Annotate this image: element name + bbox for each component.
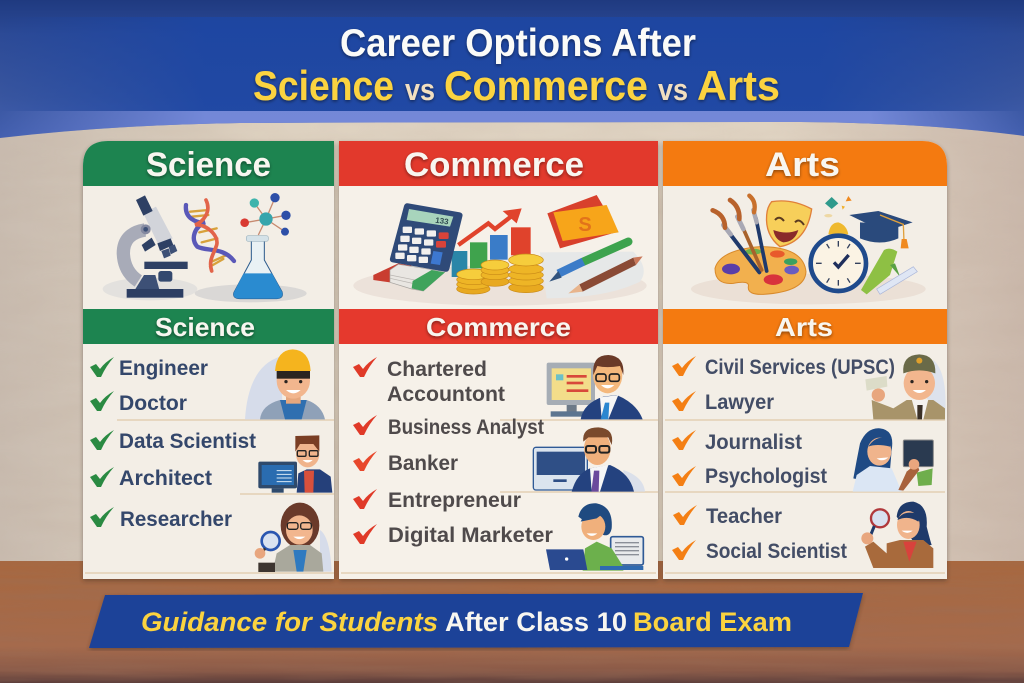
icon: confetti [824,196,852,217]
title line 2: Commerce [444,62,648,109]
banner text: Board Exam [633,607,792,637]
icon: clock [811,222,866,291]
people: commerce [533,355,645,571]
science paper card [83,141,334,579]
job: Psychologist: Psychologist [705,465,827,488]
sub header: arts [663,309,947,344]
job list: science [90,357,256,531]
panel: science [83,141,334,579]
background: wooden floor [0,561,1024,683]
job: Doctor [90,391,187,415]
icon: microscope [123,195,188,298]
banner ribbon [89,593,863,648]
job: Chartered Accountont [353,357,505,406]
job: Digital Marketer: Digital Marketer [388,524,553,547]
icon: banknotes: S [578,214,592,236]
job: Banker [353,451,458,475]
job: Banker: Banker [388,452,458,475]
icon: coin stacks [457,254,543,294]
commerce paper card [339,141,658,579]
arts heading: Arts [765,146,840,184]
row shading and dividers: science [85,420,334,573]
person: banker [533,427,645,492]
science heading: Science [146,146,271,184]
job: Doctor: Doctor [119,392,187,415]
title line 2: vs [658,72,688,107]
icon: pencil [568,256,643,293]
icon: ledger book [373,263,445,291]
icon: DNA helix [186,200,234,271]
title line 2: vs [405,72,435,107]
sub heading: science: Science [155,312,255,342]
icon: pen [549,242,628,282]
title [253,22,780,109]
footer banner [89,593,863,648]
job: Lawyer [672,391,774,414]
row dividers: commerce [341,420,658,573]
job: Entrepreneur: Entrepreneur [388,489,521,512]
arts paper card [663,141,947,579]
person: engineer [245,349,325,419]
commerce illustration [353,195,647,306]
person: digital marketer [546,503,643,571]
title line 2: Science [253,62,394,109]
title line 2: Arts [697,62,780,109]
job: Chartered Accountont: Accountont [387,383,505,406]
icon: banknotes [547,195,619,248]
arts top header [663,141,947,186]
person: data scientist [258,435,332,493]
science illustration [103,193,307,302]
icon: flask and molecule [234,193,291,299]
sub header: science [83,309,334,344]
icon: theatre mask [766,201,812,247]
people: science [245,349,332,572]
job: Data Scientist: Data Scientist [119,430,256,453]
person: civil services officer [865,354,946,419]
icon: graduation cap [849,211,913,248]
job: Social Scientist: Social Scientist [706,540,847,563]
icon: calculator [390,203,463,272]
icon: calculator: 133 [435,216,450,227]
banner text [141,607,792,637]
commerce heading: Commerce [404,146,584,184]
job list: arts [672,356,895,563]
title line 2 [253,62,780,109]
job: Architect: Architect [119,467,212,490]
job: Journalist [672,430,802,454]
job: Chartered Accountont: Chartered [387,358,487,381]
arts illustration [691,196,926,304]
job: Teacher: Teacher [706,505,782,528]
job: Engineer: Engineer [119,357,208,380]
title line 1: Career Options After [340,22,696,65]
background: blue header banner [0,0,1024,138]
icon: bar chart and arrow [452,208,531,277]
job: Business Analyst: Business Analyst [388,416,544,439]
sub heading: commerce: Commerce [426,312,571,342]
people: arts [853,354,946,568]
row dividers: arts [665,420,945,573]
icon: paint brushes [713,196,767,272]
icon: paint palette [715,247,806,294]
sub header: commerce [339,309,658,344]
person: researcher [255,503,332,572]
person: chartered accountant [547,355,643,419]
science top header [83,141,334,186]
job: Civil Services (UPSC): Civil Services (UPSC) [705,356,895,379]
sub heading: arts: Arts [775,312,833,342]
panel: commerce [339,141,658,579]
banner text: After Class 10 [445,607,627,637]
icon: green book and chalk [861,249,917,294]
person: journalist [853,428,933,492]
banner text: Guidance for Students [141,607,438,637]
panel: arts [663,141,947,579]
job: Teacher [673,505,782,528]
commerce top header [339,141,658,186]
job: Journalist: Journalist [705,431,802,454]
job: Researcher: Researcher [120,508,232,531]
person: teacher [861,502,933,568]
background: plaster wall [0,110,1024,570]
job list: commerce [353,357,553,547]
job: Lawyer: Lawyer [705,391,774,414]
